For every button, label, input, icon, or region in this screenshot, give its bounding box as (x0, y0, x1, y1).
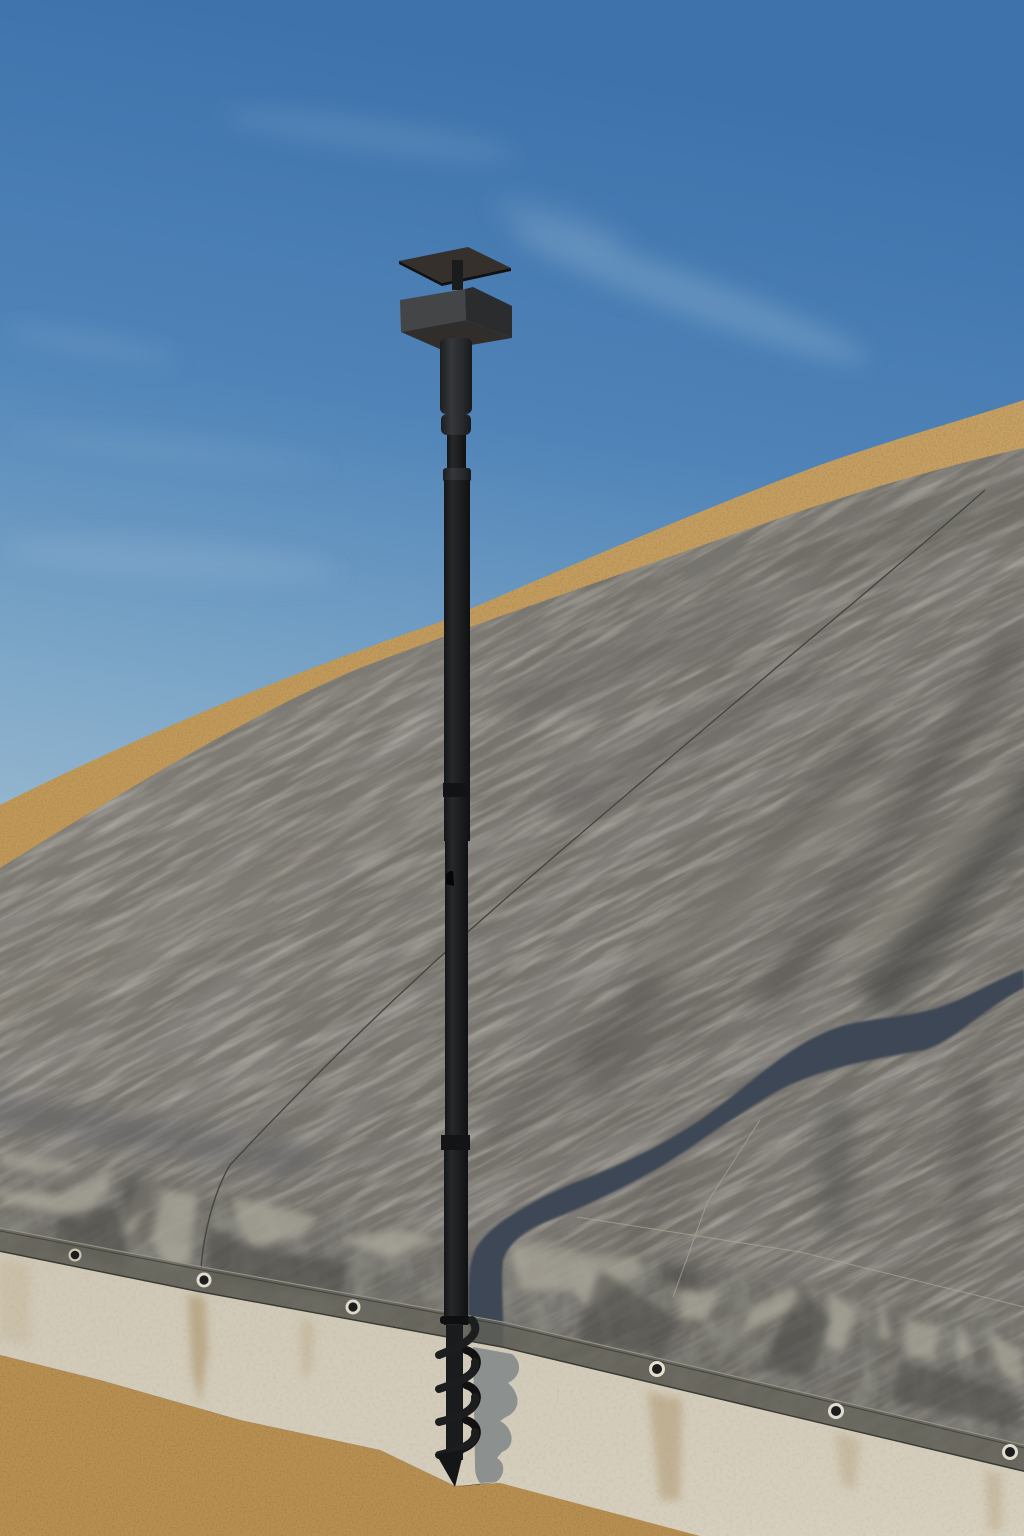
tarp seam (201, 490, 985, 1268)
grommet 1 (68, 1248, 82, 1262)
ground screw (436, 1320, 500, 1487)
tarp wrinkle texture (0, 440, 1024, 1480)
sky background (0, 0, 1024, 900)
rust stains (0, 1260, 1002, 1530)
dark fold shadows (50, 1160, 1024, 1430)
light fold highlights (0, 1150, 1024, 1385)
grommet 3 (346, 1300, 360, 1314)
tarp hem (0, 1228, 1024, 1472)
grommets (68, 1248, 1018, 1460)
concrete wall (0, 1250, 1024, 1536)
wispy clouds (0, 100, 875, 592)
solar panel (399, 247, 511, 290)
upper cylinder (440, 338, 472, 482)
electronics box (400, 287, 512, 350)
sensor pole (399, 247, 512, 1487)
grommet 5 (828, 1403, 844, 1419)
apron wrinkles (0, 1151, 1024, 1442)
stitching lines (577, 1120, 1024, 1307)
broad tarp shading bands (0, 500, 1024, 1250)
grain ground (0, 1340, 710, 1536)
shadow of pole on tarp (468, 969, 1024, 1352)
shadow of screw on wall (473, 1347, 519, 1483)
grommet 6 (1002, 1444, 1018, 1460)
pole shaft (440, 480, 471, 1325)
grain mound behind the tarp (0, 400, 1024, 900)
tarp cover (0, 440, 1024, 1480)
grommet 2 (196, 1272, 212, 1288)
grommet 4 (649, 1361, 665, 1377)
